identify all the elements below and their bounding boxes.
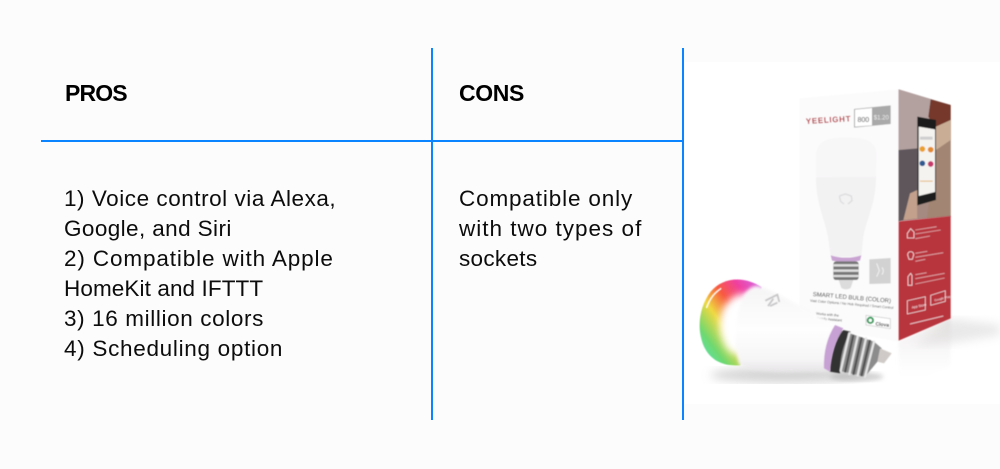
box: front face: Family Assistant: [817, 316, 842, 323]
brand name: YEELIGHT: [806, 114, 851, 126]
text block: cons: [459, 186, 642, 271]
text block: pros list: HomeKit and IFTTT: [64, 276, 263, 301]
base metal: [828, 329, 892, 377]
table grid lines: [41, 48, 684, 420]
text block: cons: with two types of: [459, 216, 642, 241]
box: front face: [799, 89, 899, 342]
bulb: ground shadow: [710, 368, 883, 382]
product title: SMART LED BULB (COLOR): [812, 292, 891, 305]
box: red side panel: [899, 216, 951, 341]
text block: pros list: [64, 186, 336, 361]
box shadow and reflection: [899, 318, 1000, 388]
highlight streak: [707, 289, 721, 307]
lumens badge: $1.20: [874, 115, 890, 121]
lumens badge: 800: [857, 117, 869, 124]
logo mark: [765, 295, 779, 306]
text block: pros list: 4) Scheduling option: [64, 336, 283, 361]
clova badge: Clova: [875, 321, 890, 329]
text block: pros list: 2) Compatible with Apple: [64, 246, 334, 271]
text block: cons: Compatible only: [459, 186, 633, 211]
google play badge: Google Play: [934, 294, 951, 302]
phone: [917, 117, 936, 205]
color rim: [700, 280, 762, 366]
lumens badge: [854, 105, 891, 128]
box: side photo with phone: [899, 89, 951, 221]
text block: pros list: 1) Voice control via Alexa,: [64, 186, 336, 211]
text block: cons: sockets: [459, 246, 537, 271]
inner glow: [720, 294, 750, 355]
product image: Yeelight box and bulb: [698, 89, 1000, 384]
app store badge: App Store: [911, 303, 927, 310]
lens body: [735, 286, 837, 372]
heading: cons: CONS: [459, 80, 524, 106]
purple ring: [824, 325, 843, 372]
box: front face: Vast Color Options / No Hub Required / Smart Control: [810, 299, 894, 310]
heading: pros: PROS: [65, 80, 127, 106]
box: front face: Works with the: [816, 312, 839, 318]
clova badge: [866, 315, 890, 329]
text block: pros list: Google, and Siri: [64, 216, 232, 241]
text block: pros list: 3) 16 million colors: [64, 306, 264, 331]
bulb picture on box: [816, 137, 877, 289]
bulb: lying color bulb: [700, 280, 892, 377]
voice control badge: [869, 258, 891, 284]
image panel background: [684, 62, 1000, 404]
